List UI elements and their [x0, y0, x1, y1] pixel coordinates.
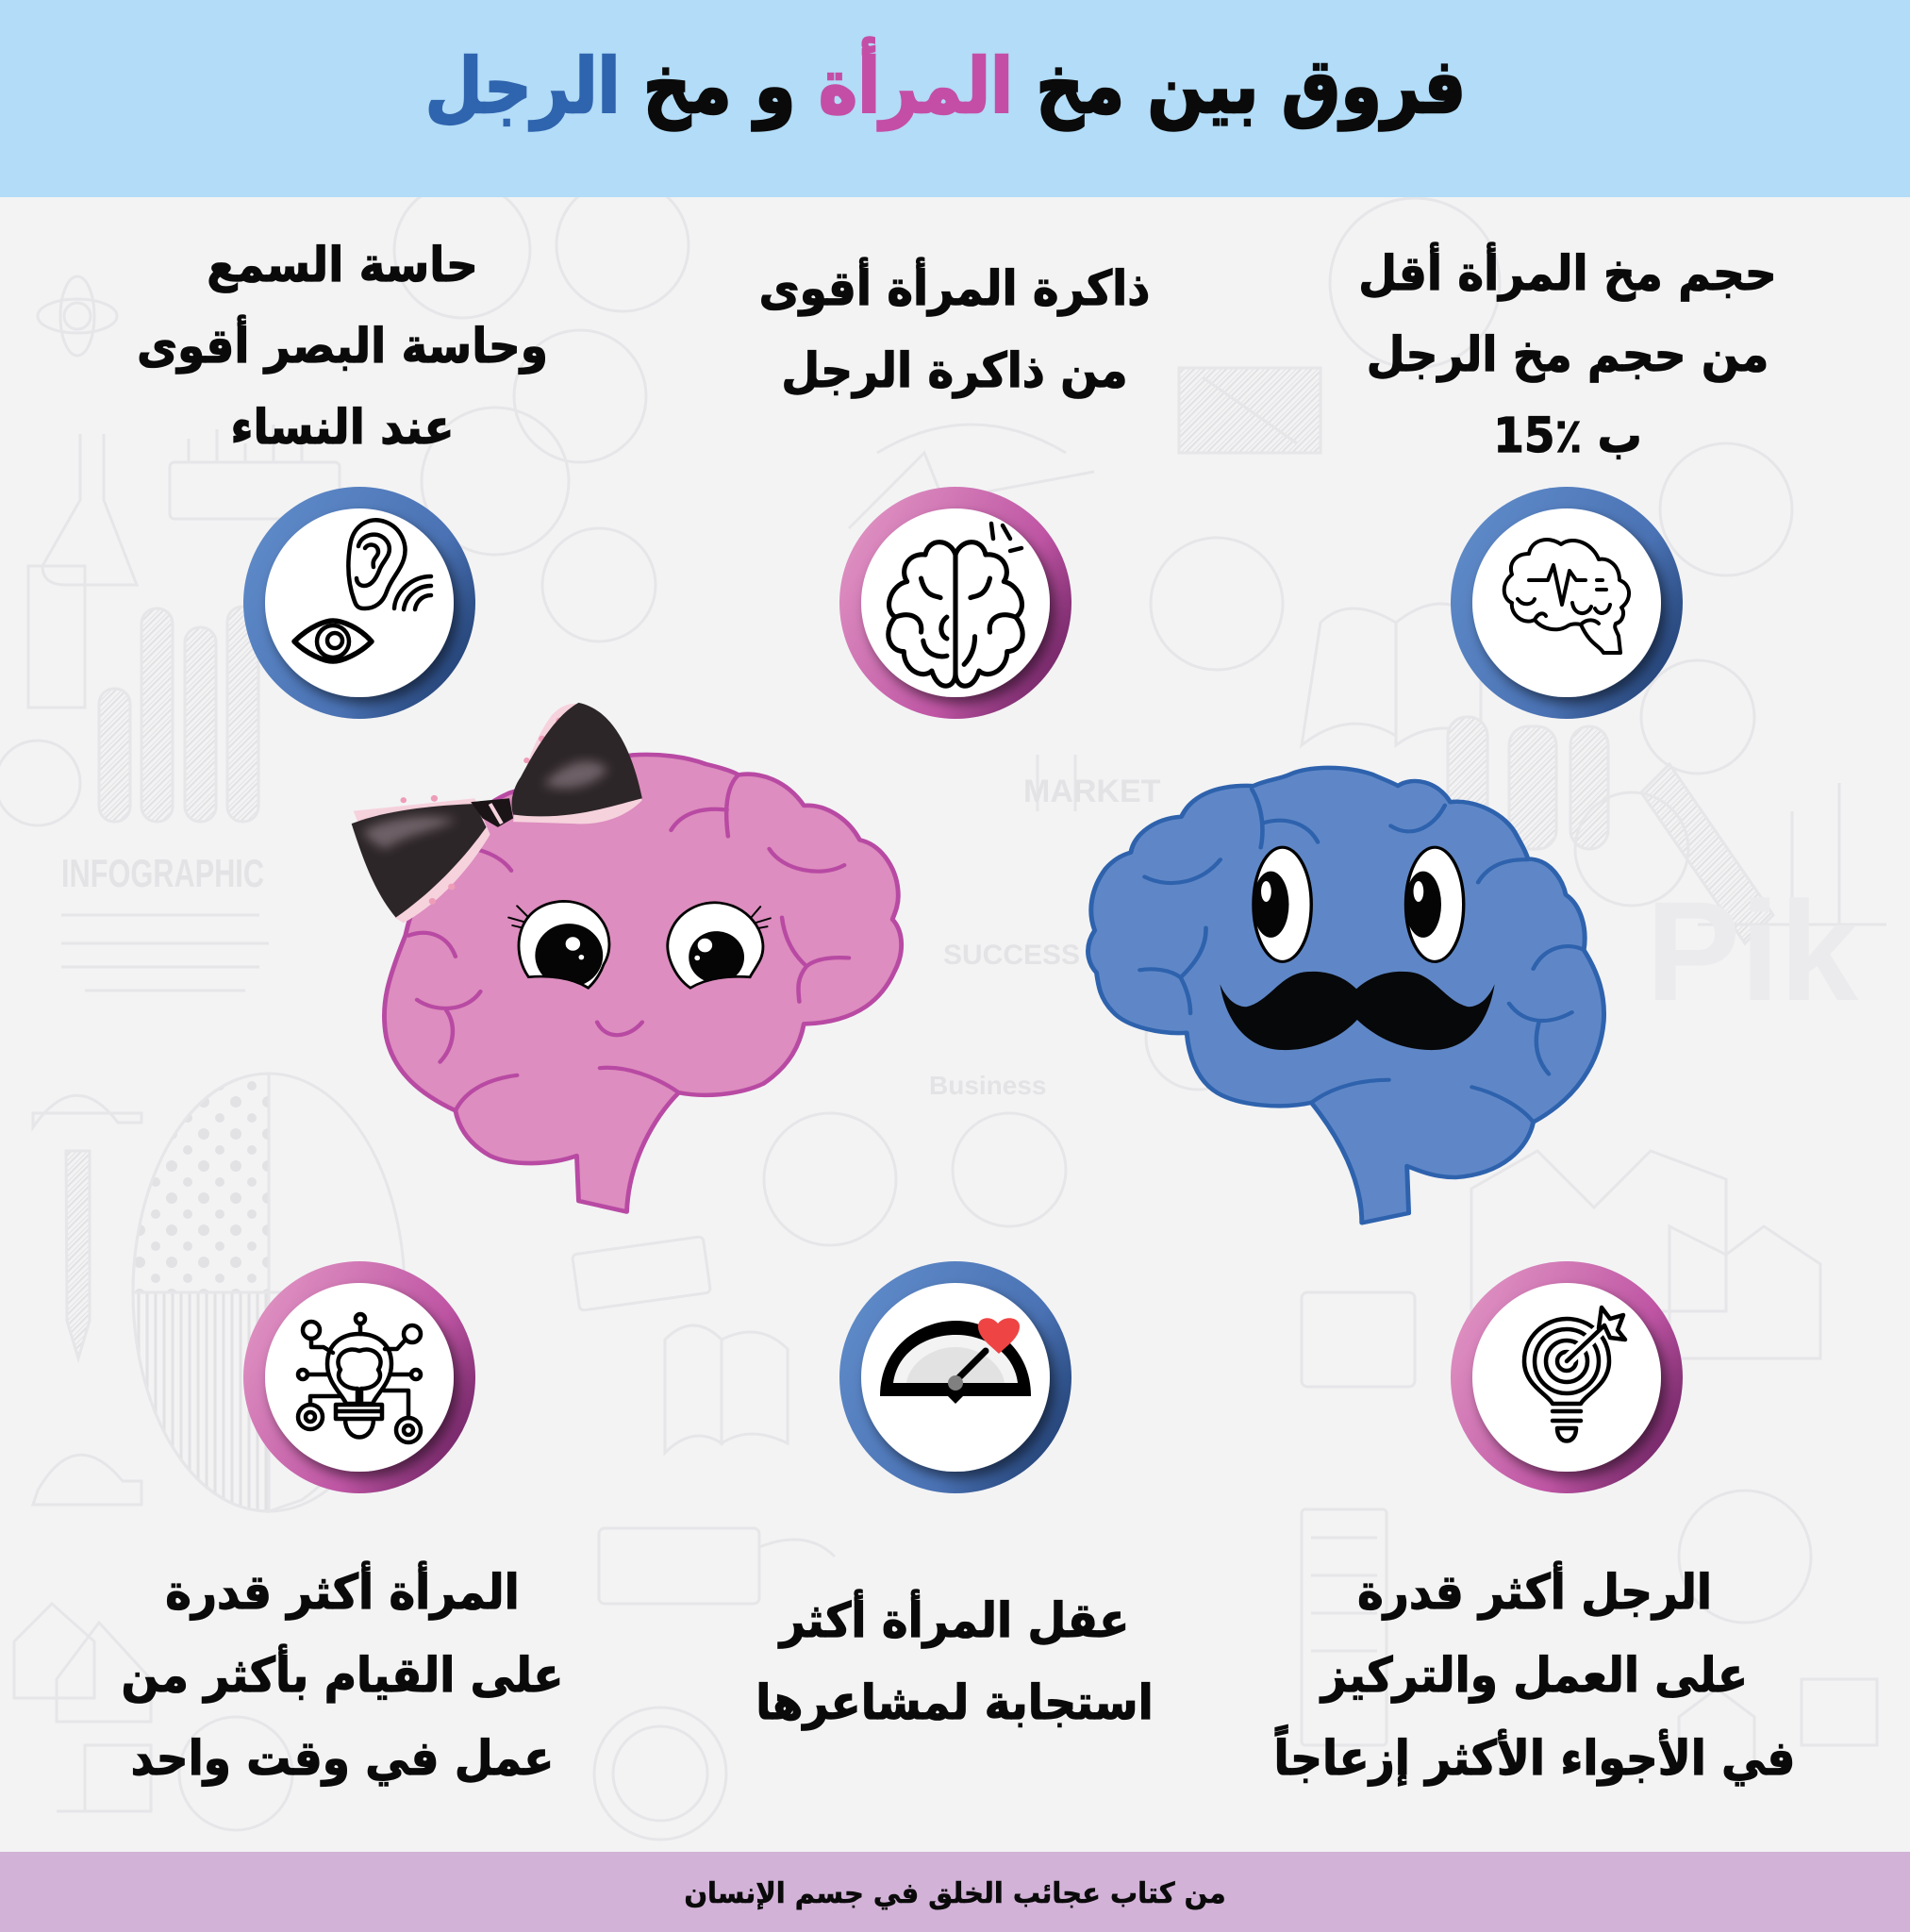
blue brain eyes — [1253, 847, 1464, 961]
text block: senses: وحاسة البصر أقوى — [137, 318, 548, 374]
background doodle pattern: Pik — [1646, 872, 1859, 1030]
badge: brain with sparks icon — [839, 487, 1071, 719]
badge: brain pulse icon — [1451, 487, 1683, 719]
text block: memory: ذاكرة المرأة أقوى — [759, 260, 1150, 316]
text block: focus — [1274, 1560, 1795, 1787]
text block: brain size: حجم مخ المرأة أقل — [1358, 245, 1777, 301]
text block: multitasking: عمل في وقت واحد — [131, 1730, 554, 1786]
text block: focus: في الأجواء الأكثر إزعاجاً — [1274, 1730, 1795, 1786]
text block: multitasking: على القيام بأكثر من — [122, 1647, 563, 1703]
badge: lightbulb brain network icon — [243, 1261, 475, 1493]
title: فروق بين مخ المرأة و مخ الرجل — [425, 42, 1466, 130]
text block: senses: عند النساء — [230, 399, 455, 455]
blue brain outline — [1088, 768, 1604, 1223]
background doodle pattern: MARKET — [1023, 774, 1161, 809]
text block: focus: على العمل والتركيز — [1321, 1647, 1748, 1703]
text block: memory: من ذاكرة الرجل — [781, 342, 1128, 398]
pink brain eyes — [508, 901, 771, 988]
text block: senses — [137, 237, 548, 455]
pink brain outline — [384, 755, 902, 1211]
badge: ear and eye icon — [243, 487, 475, 719]
blue male brain character — [1088, 768, 1604, 1223]
text block: brain size: من حجم مخ الرجل — [1367, 326, 1769, 382]
badge: target lightbulb icon — [1451, 1261, 1683, 1493]
background doodle pattern: SUCCESS — [943, 940, 1080, 971]
text block: senses: حاسة السمع — [207, 237, 478, 292]
header band — [0, 0, 1910, 197]
pink female brain character — [352, 703, 902, 1211]
background doodle pattern: INFOGRAPHIC — [61, 851, 264, 895]
text block: memory — [759, 257, 1150, 399]
footer source text: من كتاب عجائب الخلق في جسم الإنسان — [684, 1877, 1226, 1910]
text block: brain size — [1358, 242, 1777, 463]
black bow — [352, 703, 642, 923]
text block: emotions: استجابة لمشاعرها — [756, 1674, 1154, 1730]
footer band — [0, 1852, 1910, 1932]
text block: multitasking: المرأة أكثر قدرة — [165, 1564, 520, 1620]
text block: brain size: ب ٪15 — [1493, 408, 1642, 463]
mustache — [1220, 972, 1495, 1050]
badge: emotion gauge icon — [839, 1261, 1071, 1493]
text block: emotions — [756, 1589, 1154, 1731]
text block: multitasking — [122, 1560, 563, 1787]
text block: focus: الرجل أكثر قدرة — [1357, 1564, 1712, 1620]
background doodle pattern: Business — [929, 1071, 1047, 1100]
text block: emotions: عقل المرأة أكثر — [780, 1592, 1129, 1648]
